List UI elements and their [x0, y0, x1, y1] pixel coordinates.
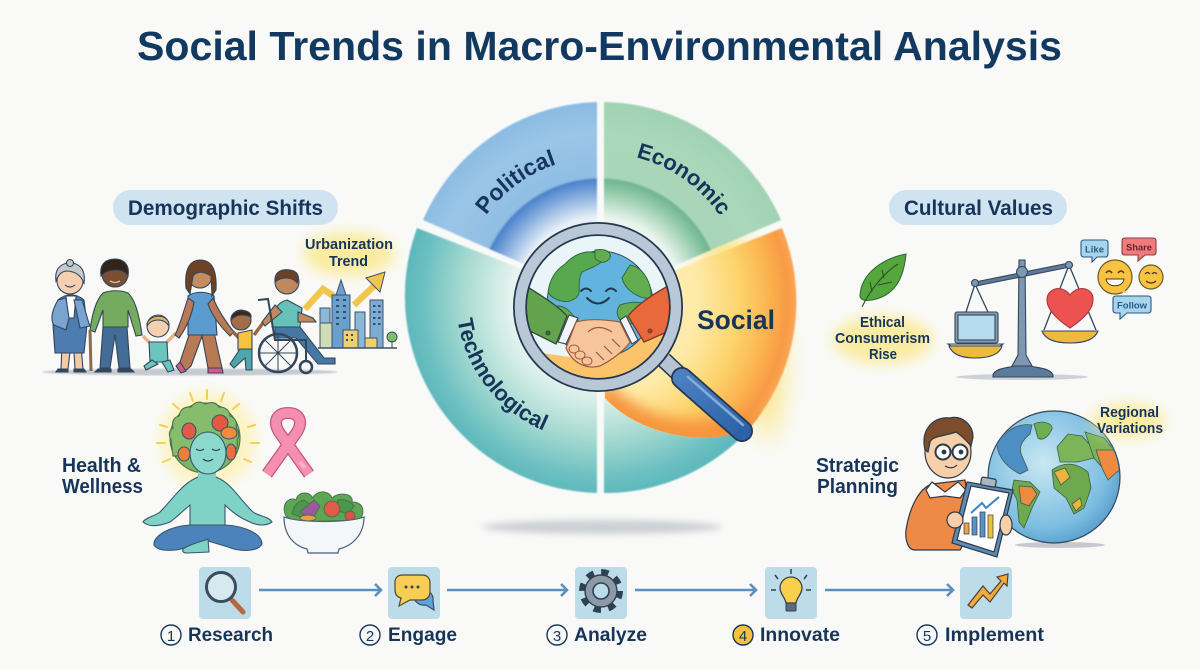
pill: cultural values: Cultural Values [904, 197, 1053, 220]
regional variations label: Regional [1100, 404, 1159, 421]
bubble: follow: Follow [1117, 300, 1148, 312]
PESTEL wheel [376, 101, 801, 574]
smiling globe [547, 249, 653, 357]
ground shadow [42, 368, 338, 376]
process: step 5 implement [917, 567, 1045, 646]
halo [160, 392, 256, 488]
segment: economic [604, 102, 781, 296]
family group illustration [42, 259, 338, 376]
handle [664, 360, 743, 431]
bubble: share: Share [1126, 242, 1152, 254]
laptop [948, 312, 1003, 358]
strategic planning label [816, 455, 899, 498]
step label: Analyze [574, 625, 647, 646]
icon: chat bubbles [388, 567, 440, 619]
green sleeve [527, 288, 568, 345]
magnifying glass with globe and handshake [520, 229, 743, 431]
salad bowl [284, 492, 364, 553]
child in yellow [230, 310, 263, 370]
pill: demographic shifts: Demographic Shifts [128, 197, 323, 220]
base and post [993, 366, 1053, 377]
shadow [956, 374, 1088, 380]
rays [157, 390, 259, 462]
globe shadow [1015, 542, 1105, 548]
clipboard [952, 482, 1013, 557]
label: political: Political [474, 149, 555, 214]
right pan [1042, 331, 1098, 343]
step label: Research [188, 625, 273, 646]
arrow 1 to 2 [259, 584, 381, 596]
awareness ribbon [267, 413, 309, 474]
wheel ground shadow [482, 520, 722, 534]
step label: 1 [167, 628, 175, 645]
body [143, 475, 272, 526]
pill: cultural values [889, 190, 1067, 225]
handshake [558, 315, 638, 367]
wheelchair [258, 299, 312, 373]
ethical consumerism label: Rise [869, 346, 897, 363]
label: social: Social [697, 305, 775, 335]
step label: 4 [739, 628, 747, 645]
city with growth arrow [305, 272, 397, 348]
lens [526, 235, 670, 379]
toddler [143, 315, 176, 372]
arrow 2 to 3 [447, 584, 567, 596]
earth globe with regions [988, 411, 1120, 548]
health and wellness label: Health & [62, 455, 141, 477]
crossed legs [154, 525, 262, 550]
step label: Innovate [760, 625, 840, 646]
segment: social [600, 228, 796, 437]
step label: 5 [923, 628, 931, 645]
icon: light bulb [765, 567, 817, 619]
orange sleeve [627, 286, 669, 343]
urbanization glow and label: Trend [329, 253, 368, 270]
segment: political [423, 102, 597, 296]
label: technological: Technological [458, 317, 549, 430]
pill: demographic shifts [113, 190, 338, 225]
beam [975, 263, 1070, 286]
left chains [966, 265, 1096, 330]
vegetable hair [169, 402, 240, 473]
lens content [527, 249, 669, 378]
strategic planning label: Planning [817, 476, 898, 498]
grandmother [52, 260, 90, 372]
heart [1047, 289, 1093, 328]
health and wellness label [62, 455, 143, 498]
label: economic: Economic [637, 143, 728, 214]
hands [947, 512, 963, 528]
icon: rising arrow [960, 567, 1012, 619]
strategist holding clipboard [906, 417, 1013, 557]
woman [175, 260, 234, 373]
title: Social Trends in Macro-Environmental Analysis [137, 23, 1062, 69]
balance scale [948, 260, 1098, 380]
ethical consumerism label [833, 314, 933, 364]
wheelchair user [258, 270, 335, 373]
body [906, 480, 972, 550]
ethical consumerism label: Ethical [860, 314, 905, 331]
step label: Engage [388, 625, 457, 646]
segment: technological [405, 228, 752, 493]
step label: 2 [366, 628, 374, 645]
step label: Implement [945, 625, 1045, 646]
regional variations label: Variations [1097, 420, 1163, 437]
icon: leaf [860, 254, 906, 307]
strategic planning label: Strategic [816, 455, 899, 477]
bubble: like: Like [1085, 244, 1104, 256]
continents [997, 422, 1120, 528]
man with cane [90, 259, 142, 372]
ethical consumerism label: Consumerism [835, 330, 930, 347]
urbanization glow and label [303, 232, 395, 276]
process: step 3 analyze [547, 567, 647, 646]
arrow 3 to 4 [635, 584, 756, 596]
head [190, 432, 226, 474]
process: step 1 research [161, 567, 273, 646]
emoji: smiling [1139, 265, 1163, 289]
arrow 4 to 5 [825, 584, 953, 596]
social media bubbles [1081, 238, 1163, 319]
social glow [700, 200, 786, 445]
regional variations label [1091, 404, 1165, 438]
meditating figure [143, 390, 272, 553]
lens ring [520, 229, 676, 385]
process: step 4 innovate [733, 567, 840, 646]
icon: magnifier [199, 567, 251, 619]
process: step 2 engage [360, 567, 457, 646]
chart bars [964, 523, 969, 534]
health and wellness label: Wellness [62, 476, 143, 498]
head [925, 426, 971, 478]
icon: gear [575, 567, 627, 619]
step label: 3 [553, 628, 561, 645]
urbanization glow and label: Urbanization [305, 236, 393, 253]
emoji: laughing [1098, 260, 1132, 294]
